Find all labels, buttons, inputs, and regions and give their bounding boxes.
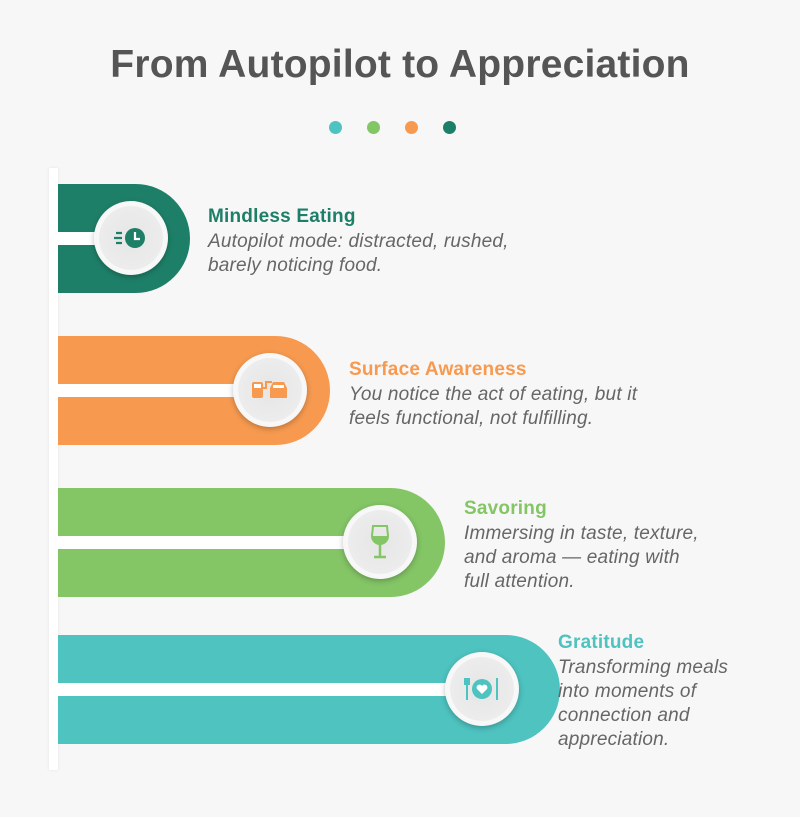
text: mindless eating: Autopilot mode: distracted, rushed,	[208, 231, 509, 252]
text: surface awareness	[349, 359, 638, 429]
dots	[329, 121, 456, 134]
text: mindless eating	[207, 206, 509, 276]
text: savoring: Immersing in taste, texture,	[464, 523, 699, 544]
panel: gratitude	[58, 635, 560, 744]
text: savoring	[464, 498, 699, 592]
text: savoring: Savoring	[464, 498, 547, 519]
text: savoring: full attention.	[464, 571, 575, 592]
icon: clock	[94, 201, 168, 275]
text: mindless eating: barely noticing food.	[208, 255, 382, 276]
text: gratitude: Transforming meals	[558, 657, 728, 678]
panel: surface awareness	[58, 336, 330, 445]
text: gratitude: connection and	[558, 705, 690, 726]
panel: mindless eating	[58, 184, 190, 293]
text: gratitude: Gratitude	[558, 632, 644, 653]
text: surface awareness: Surface Awareness	[349, 359, 527, 380]
text: mindless eating: Mindless Eating	[208, 206, 356, 227]
vertical line	[49, 168, 58, 770]
icon: plate heart	[445, 652, 519, 726]
text: gratitude	[558, 632, 728, 750]
text: surface awareness: feels functional, not fulfilling.	[349, 408, 593, 429]
text: surface awareness: You notice the act of eating, but it	[349, 384, 637, 405]
text: gratitude: appreciation.	[558, 729, 669, 750]
icon: fuel car	[233, 353, 307, 427]
title: From Autopilot to Appreciation	[110, 43, 690, 86]
panel: savoring	[58, 488, 445, 597]
text: savoring: and aroma — eating with	[464, 547, 680, 568]
text: gratitude: into moments of	[558, 681, 696, 702]
icon: wine glass	[343, 505, 417, 579]
